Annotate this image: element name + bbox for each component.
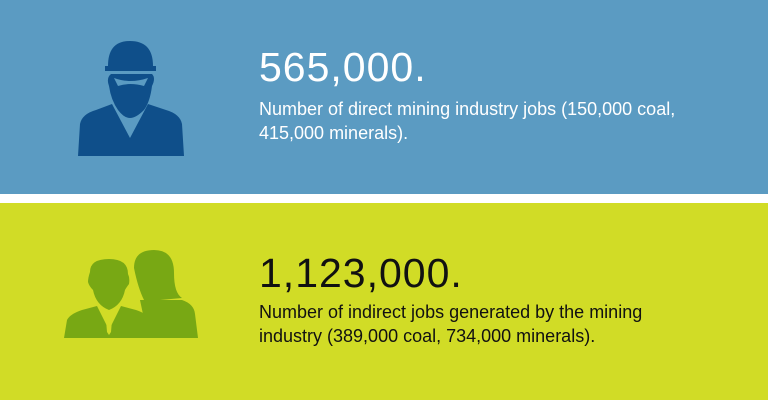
text: indirect jobs description: Number of indirect jobs generated by the mining industry (389,000 coal, 734,000 minerals).: [259, 302, 642, 346]
icon: people: [64, 250, 198, 338]
icon: miner: [78, 41, 184, 156]
panel: direct jobs: [0, 0, 768, 194]
panel: indirect jobs: [0, 203, 768, 400]
heading: 565,000: 565,000.: [259, 44, 427, 90]
text: direct jobs description: Number of direct mining industry jobs (150,000 coal, 415,000 minerals).: [259, 99, 675, 143]
heading: 1,123,000: 1,123,000.: [259, 250, 463, 296]
